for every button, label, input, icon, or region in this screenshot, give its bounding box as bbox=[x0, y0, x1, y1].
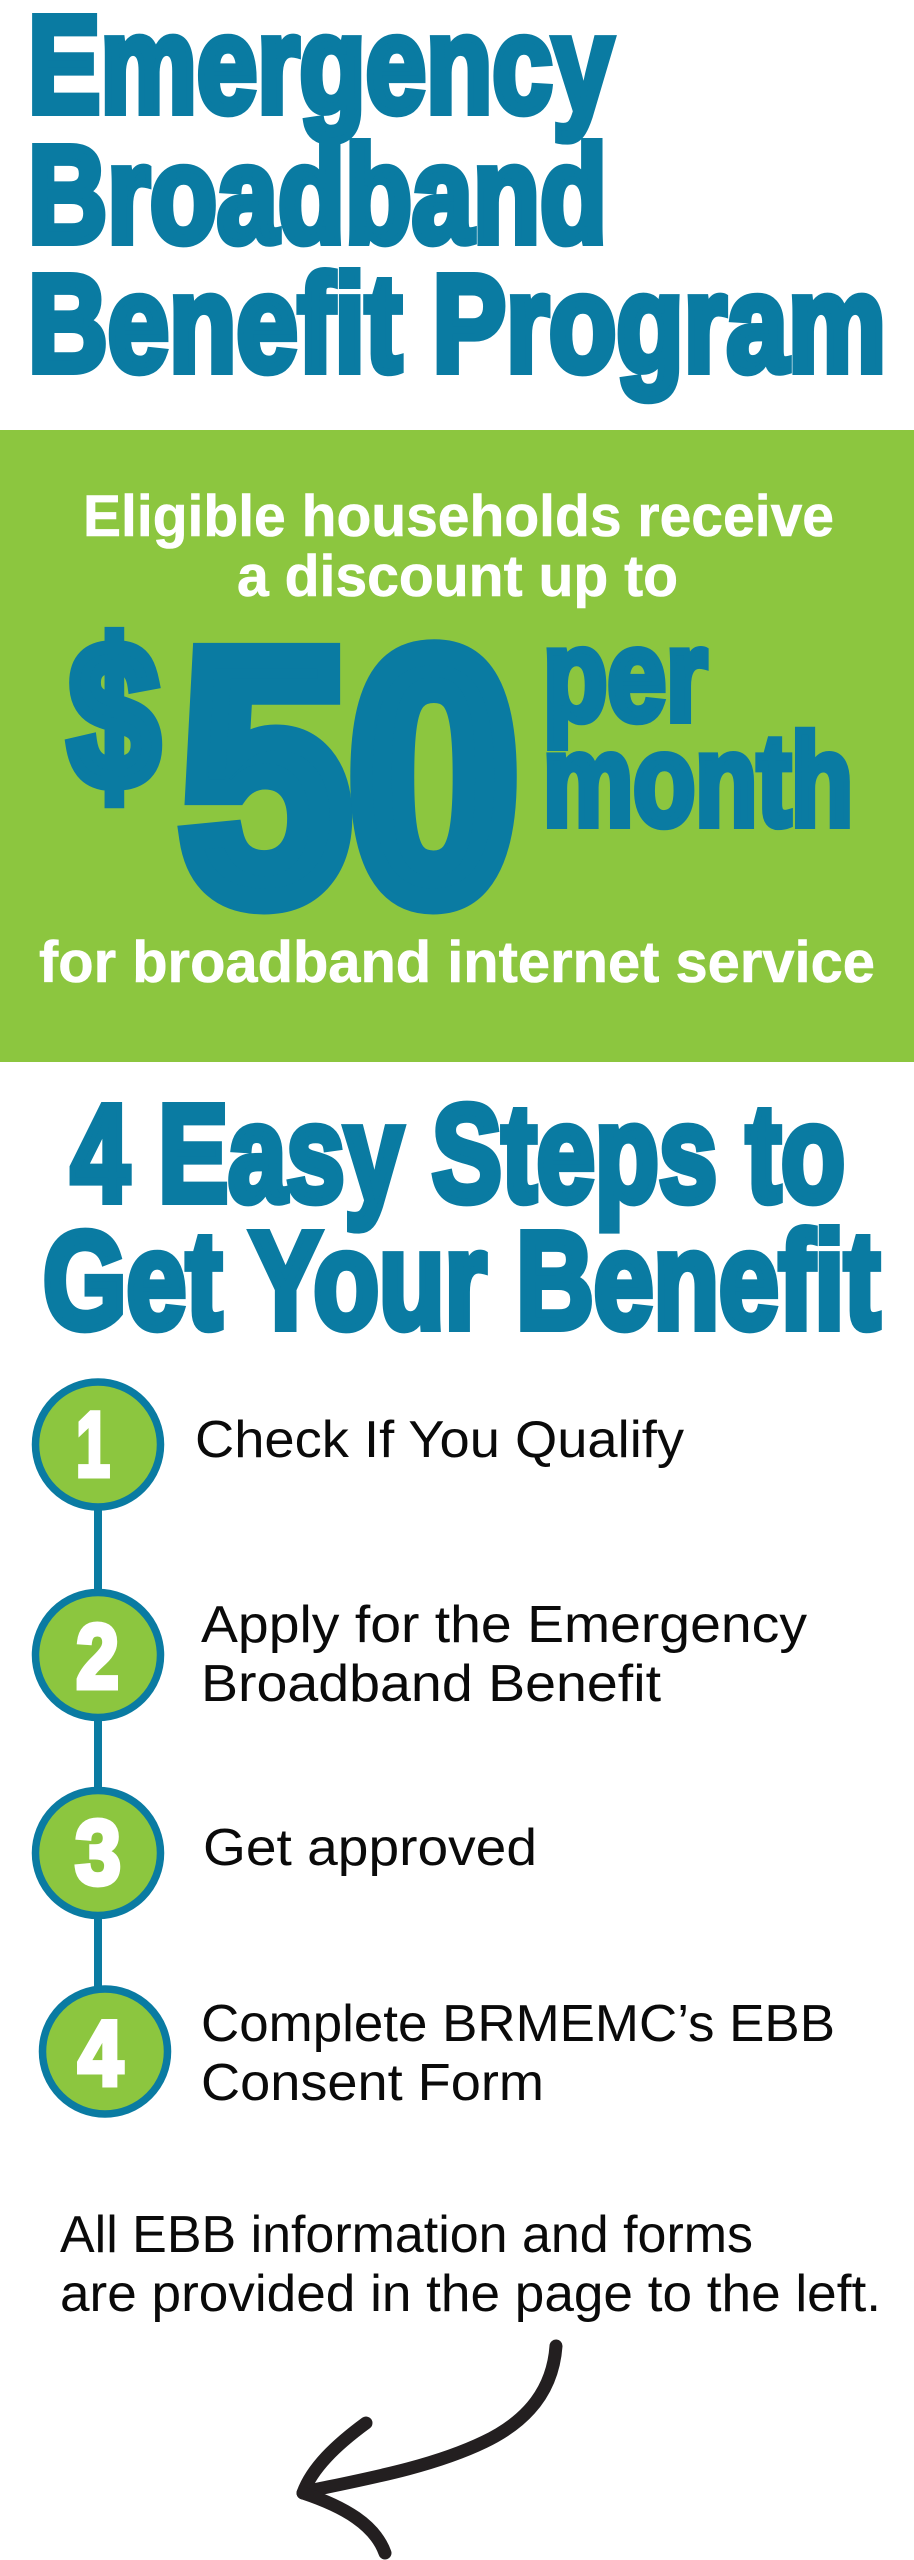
offer intro text: Eligible households receive bbox=[83, 484, 834, 549]
badge 2: 2 bbox=[76, 1606, 119, 1708]
per month bbox=[543, 602, 853, 853]
icon: curved arrow pointing left bbox=[303, 2346, 556, 2553]
badge 3: 3 bbox=[75, 1802, 121, 1904]
heading: 4 easy steps bbox=[43, 1077, 880, 1358]
offer intro text bbox=[83, 484, 834, 609]
badge 1 bbox=[36, 1382, 160, 1507]
badge 4: 4 bbox=[78, 2003, 123, 2105]
note text: All EBB information and forms bbox=[60, 2206, 753, 2264]
title: Broadband bbox=[28, 118, 607, 272]
panel: discount offer bbox=[0, 430, 914, 1062]
offer intro text: a discount up to bbox=[237, 544, 678, 609]
badge 3 bbox=[36, 1790, 160, 1916]
step 2 bbox=[36, 1592, 807, 1718]
badge 4 bbox=[42, 1989, 168, 2114]
fifty amount: 50 bbox=[181, 579, 518, 973]
dollar sign: $ bbox=[69, 601, 159, 830]
step 1 label: Check If You Qualify bbox=[195, 1411, 684, 1469]
step 2 label: Broadband Benefit bbox=[201, 1655, 662, 1713]
step 3 bbox=[36, 1790, 537, 1916]
offer closing text: for broadband internet service bbox=[39, 930, 875, 995]
step 2 label: Apply for the Emergency bbox=[201, 1596, 807, 1654]
step 2 label bbox=[201, 1596, 807, 1713]
step 4 label bbox=[201, 1995, 835, 2112]
step 4 bbox=[42, 1989, 835, 2114]
step 4 label: Complete BRMEMC’s EBB bbox=[201, 1995, 835, 2053]
note text: are provided in the page to the left. bbox=[60, 2265, 881, 2323]
step 3 label: Get approved bbox=[203, 1819, 537, 1877]
step 4 label: Consent Form bbox=[201, 2054, 544, 2112]
title bbox=[28, 0, 886, 401]
per month: per bbox=[543, 602, 707, 748]
step 1 bbox=[36, 1382, 684, 1507]
note text bbox=[60, 2206, 881, 2323]
badge 2 bbox=[36, 1592, 160, 1718]
connector lines bbox=[94, 1505, 102, 1991]
badge 1: 1 bbox=[76, 1394, 110, 1496]
